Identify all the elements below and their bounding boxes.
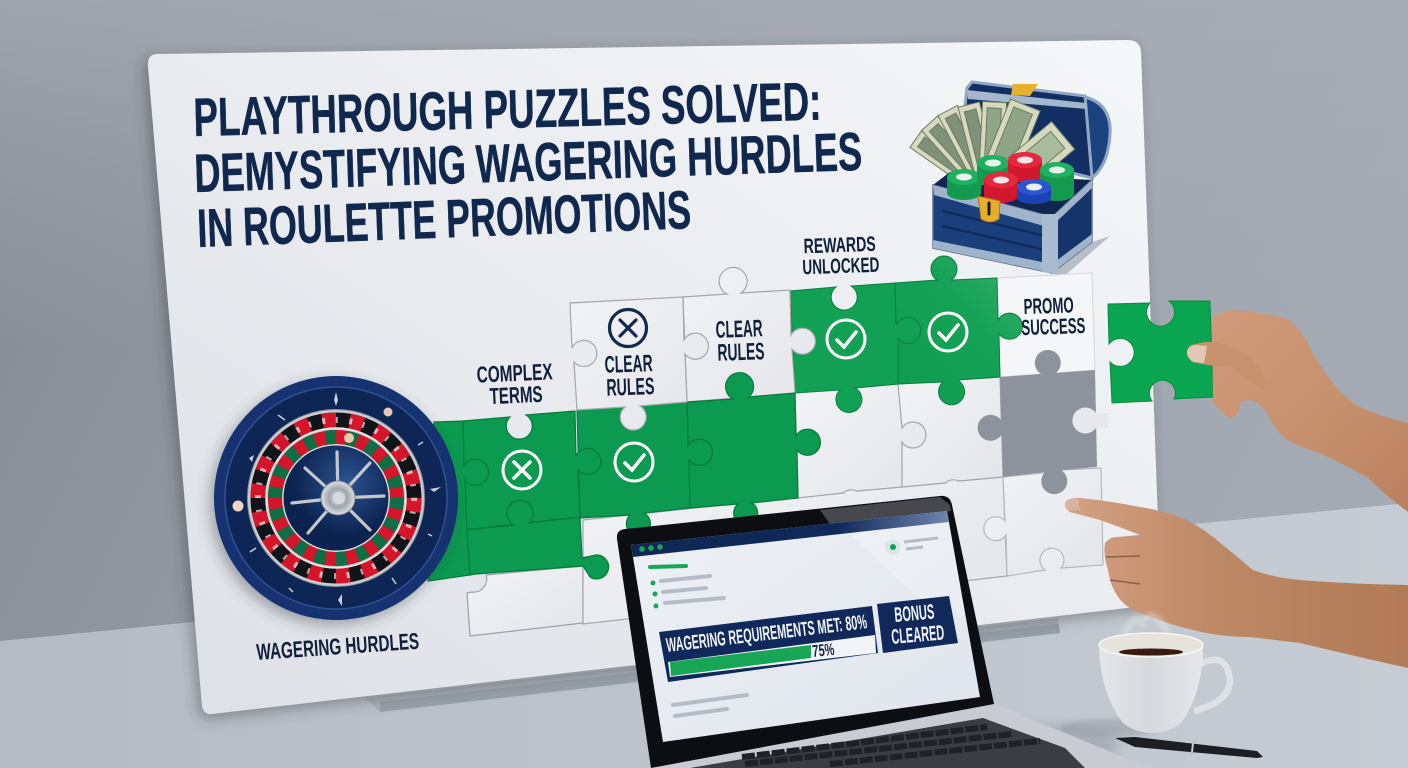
roulette wheel (214, 376, 458, 620)
green check piece right (895, 256, 1022, 405)
pen (1115, 737, 1263, 758)
green check piece left (790, 283, 921, 412)
green band end (687, 373, 820, 525)
label: wagering hurdles: WAGERING HURDLES (256, 628, 420, 665)
label: clear rules 1: CLEAR (604, 350, 653, 379)
title: PLAYTHROUGH PUZZLES SOLVED: (193, 72, 822, 148)
label: clear rules 1 (604, 350, 655, 402)
screen list (650, 566, 747, 716)
label: promo success (1020, 292, 1086, 340)
wheel centre (283, 445, 389, 551)
pocket rings (258, 420, 414, 576)
label: complex terms (476, 358, 555, 410)
wheel rim (214, 376, 458, 620)
cup body (1099, 645, 1203, 733)
icon: check circle 1 (615, 443, 653, 481)
lower hand pointing (1065, 498, 1408, 668)
open lid (960, 82, 1110, 178)
lower-left white piece (467, 566, 583, 636)
thumb (1187, 342, 1268, 392)
puzzle grid (428, 256, 1108, 636)
board tab into slot (1072, 407, 1108, 433)
rim markers (232, 392, 441, 606)
gold lock (978, 196, 1000, 222)
progress track (668, 635, 876, 677)
chest side (1042, 180, 1092, 274)
label: rewards unlocked: UNLOCKED (802, 254, 880, 279)
laptop bezel (617, 496, 994, 768)
board stand (365, 618, 1060, 712)
keyboard (690, 718, 1085, 768)
empty puzzle slot (978, 350, 1097, 494)
fingernail (1065, 498, 1080, 511)
poker chips (947, 152, 1074, 204)
title: IN ROULETTE PROMOTIONS (196, 180, 692, 259)
steam (1125, 616, 1168, 634)
title: DEMYSTIFYING WAGERING HURDLES (193, 122, 863, 204)
bonus cleared badge: CLEARED (890, 621, 945, 649)
bottom row white pieces (583, 458, 1007, 624)
icon: check circle 3 (929, 313, 967, 351)
white piece row two left (795, 384, 926, 498)
label: promo success: SUCCESS (1021, 313, 1086, 340)
progress percentage: 75% (811, 640, 835, 661)
icon: check circle 2 (827, 320, 865, 358)
chest shadow (1052, 236, 1110, 278)
loose green puzzle piece (1108, 301, 1213, 403)
label: complex terms: COMPLEX (476, 358, 554, 388)
bonus cleared badge (877, 596, 958, 653)
coffee cup (1060, 616, 1230, 737)
screen header (631, 511, 949, 557)
label: clear rules 1: RULES (606, 373, 655, 402)
icon: treasure chest (910, 82, 1110, 278)
chest interior (933, 172, 1092, 217)
wagering progress panel (659, 606, 878, 682)
label: clear rules 2: CLEAR (715, 315, 763, 344)
title (193, 72, 863, 259)
finger creases (1106, 556, 1140, 584)
wagering heading: WAGERING REQUIREMENTS MET: 80% (665, 611, 868, 657)
white clear rules piece right (683, 267, 815, 402)
hub (321, 481, 355, 515)
laptop shadow (960, 725, 1120, 765)
screen avatar (886, 538, 938, 554)
white piece bottom right (984, 468, 1103, 576)
promo success piece (997, 273, 1095, 377)
chest front (933, 185, 1052, 273)
display board (148, 40, 1161, 714)
cup rim and coffee (1099, 633, 1203, 657)
green complex terms piece (463, 411, 601, 530)
label: clear rules 2: RULES (717, 338, 765, 367)
silver spokes (292, 452, 384, 533)
label: rewards unlocked: REWARDS (803, 233, 876, 258)
label: complex terms: TERMS (489, 381, 543, 409)
cup handle (1194, 660, 1230, 711)
white clear rules piece left (570, 297, 708, 430)
laptop screen (631, 511, 980, 742)
icon: x circle navy (610, 310, 646, 346)
screen glare (840, 511, 965, 615)
green band lower (465, 501, 609, 579)
laptop base (650, 705, 1150, 768)
bonus cleared badge: BONUS (893, 601, 935, 627)
bezel glare (820, 497, 951, 524)
label: promo success: PROMO (1023, 292, 1074, 319)
green band left (428, 421, 488, 581)
laptop (617, 496, 1150, 768)
thumbnail (1187, 345, 1207, 363)
progress fill (670, 645, 811, 676)
table surface (0, 503, 1408, 768)
white piece row two right (898, 377, 1003, 487)
label: clear rules 2 (715, 315, 765, 367)
banknotes (910, 99, 1075, 203)
green band centre (577, 402, 712, 536)
upper hand holding piece (1187, 310, 1408, 512)
label: rewards unlocked (801, 233, 880, 279)
cup shadow (1060, 719, 1160, 737)
icon: x circle white (503, 451, 541, 489)
